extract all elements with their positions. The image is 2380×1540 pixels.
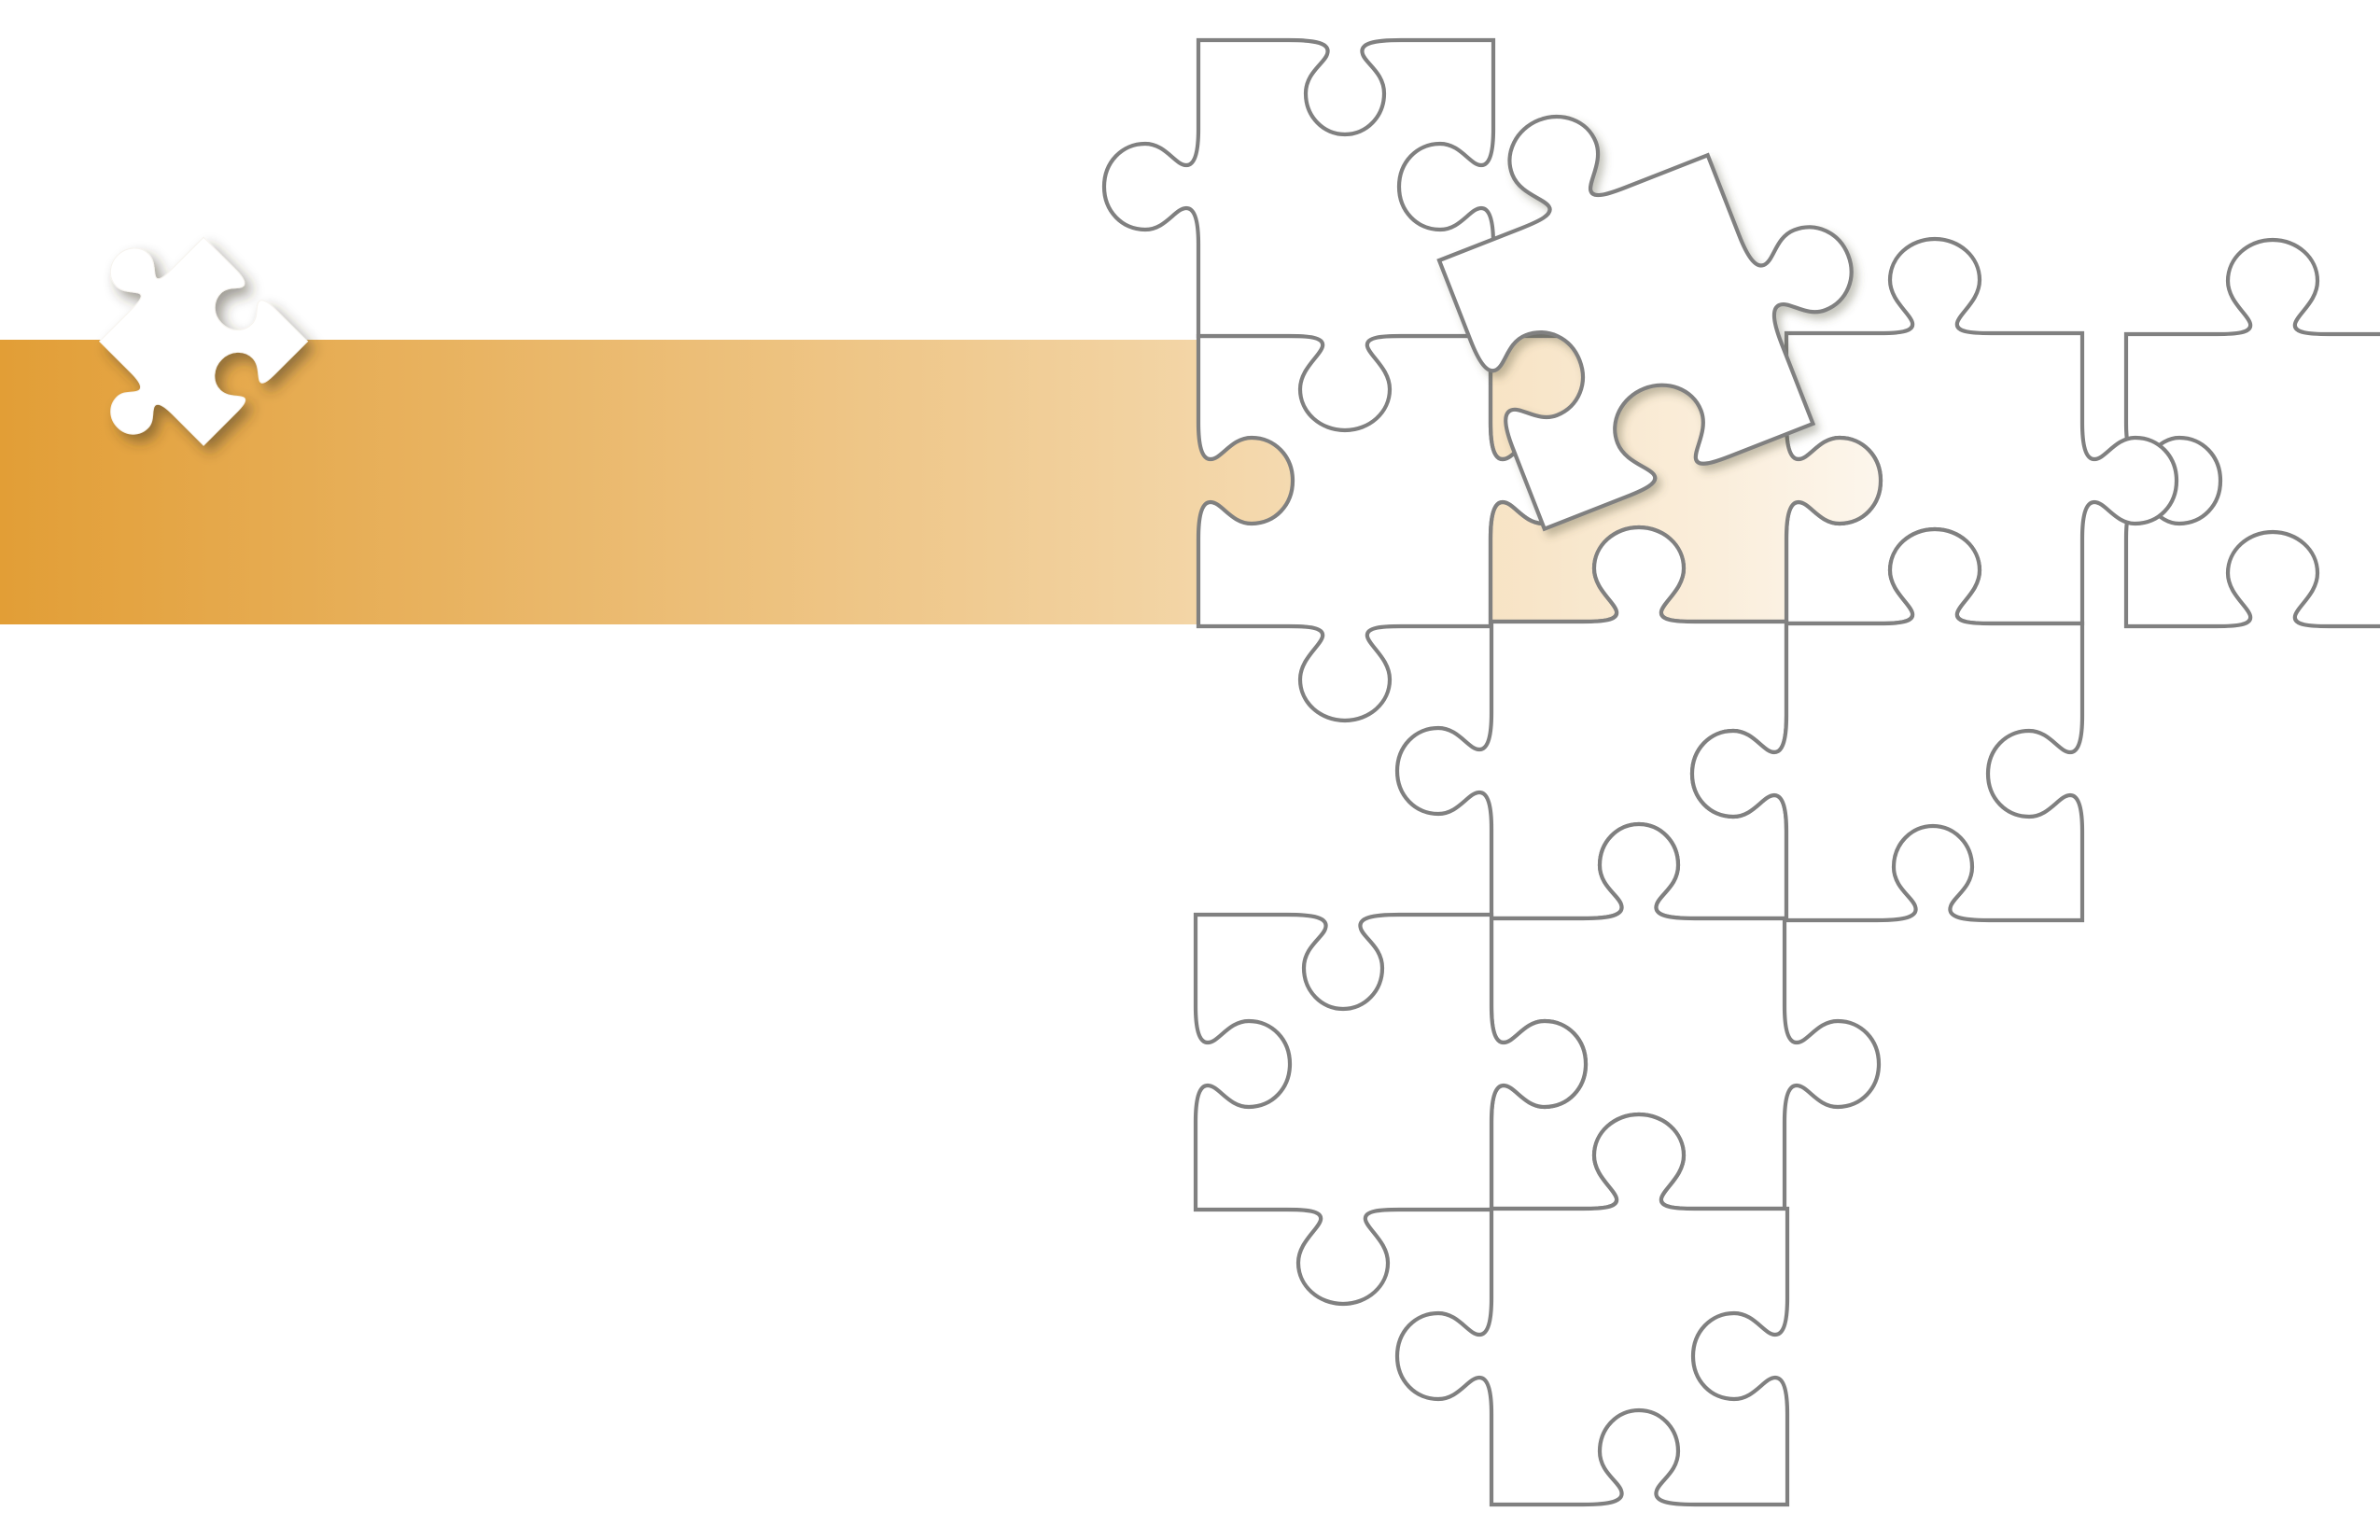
puzzle piece: row 4 left	[1196, 915, 1586, 1304]
puzzle piece: bottom	[1397, 1114, 1787, 1505]
puzzle piece: top left	[1104, 40, 1493, 430]
puzzle piece: far right	[2126, 240, 2380, 626]
puzzle piece: row 3 middle	[1397, 527, 1786, 918]
puzzle piece: row 2 left	[1198, 336, 1585, 721]
white puzzle piece icon on banner	[32, 203, 308, 480]
orange gradient banner	[0, 340, 1293, 624]
tilted puzzle piece with shadow	[1405, 33, 1900, 529]
puzzle piece: row 3 right	[1692, 529, 2082, 920]
puzzle piece: row 2 right	[1786, 239, 2177, 623]
puzzle piece: row 4 middle	[1491, 824, 1879, 1209]
puzzle piece: highlighted orange slot	[1491, 336, 1881, 622]
